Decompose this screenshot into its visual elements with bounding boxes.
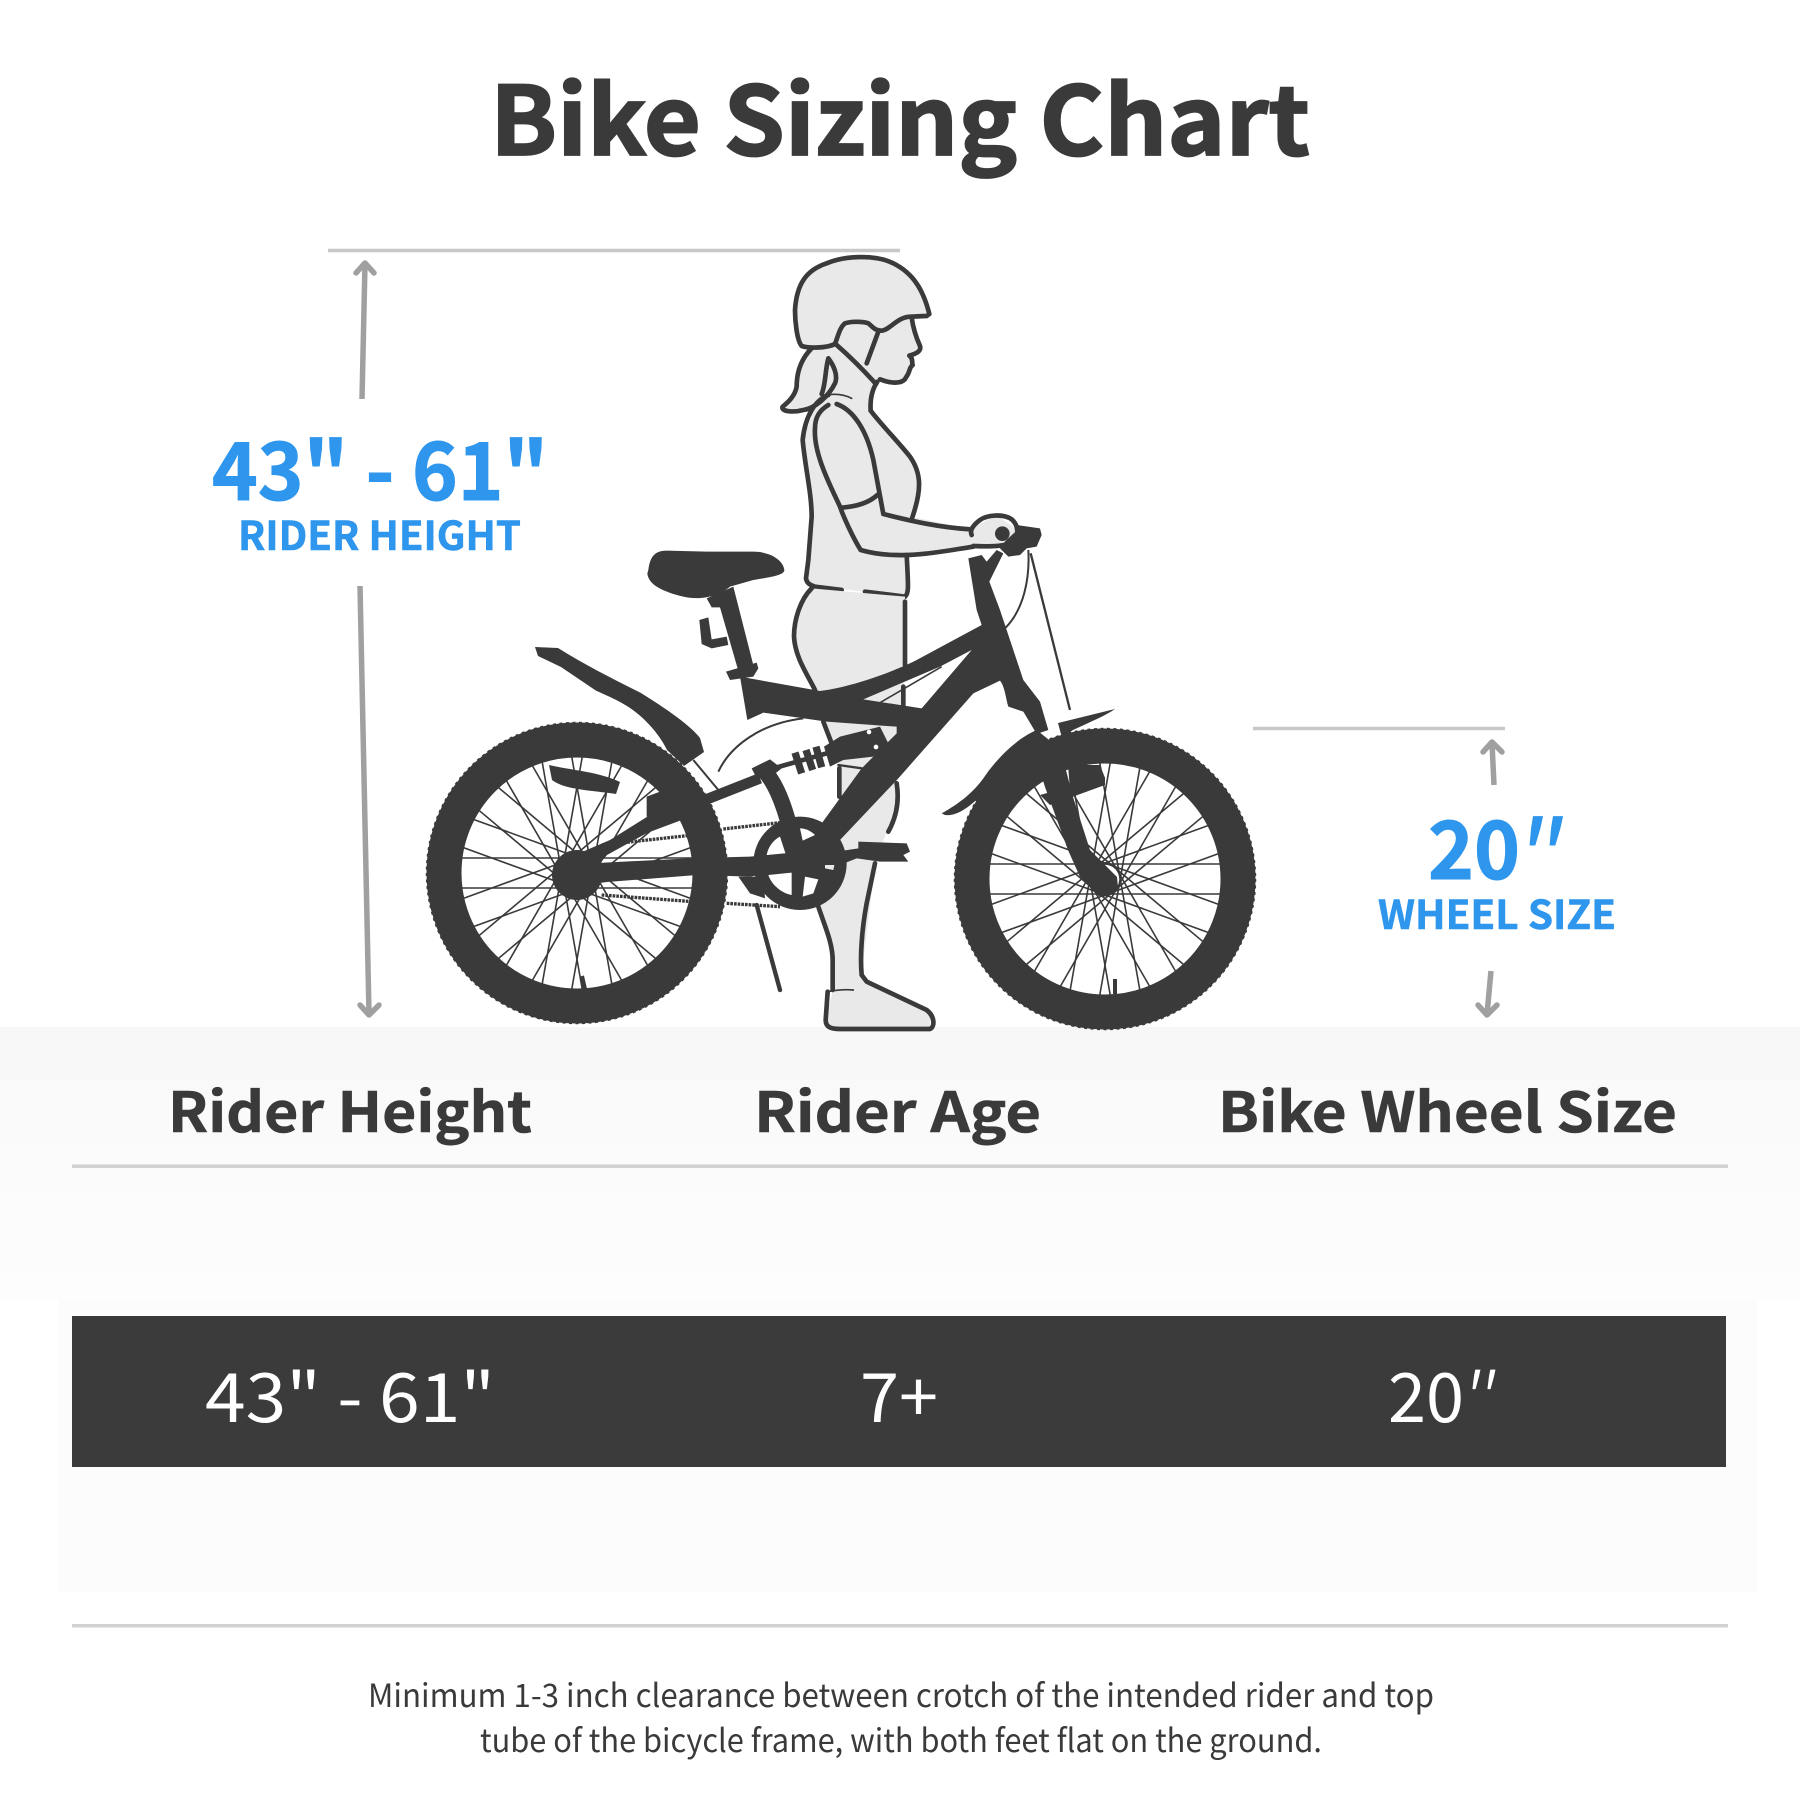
arrow: rider height down bbox=[360, 586, 379, 1015]
table background panel bbox=[0, 1027, 1800, 1592]
arrow: wheel size down bbox=[1478, 971, 1497, 1015]
chain bbox=[602, 823, 780, 907]
data: rider age: 7+ bbox=[860, 1343, 938, 1442]
title: Bike Sizing Chart bbox=[490, 46, 1310, 183]
rear fender and reflector bbox=[535, 647, 704, 794]
rear shock bbox=[773, 727, 888, 773]
table header: rider height: Rider Height bbox=[168, 1068, 532, 1148]
wheel size value: '' bbox=[1516, 787, 1563, 903]
crank arm and pedal bbox=[837, 842, 910, 865]
footnote line 1: Minimum 1-3 inch clearance between crotch of the intended rider and top bbox=[368, 1671, 1434, 1717]
front fork, fender and brake bbox=[942, 709, 1118, 897]
chainring bbox=[753, 817, 847, 910]
data: wheel size: 20 bbox=[1388, 1343, 1464, 1442]
front wheel bbox=[955, 729, 1255, 1029]
wheel size top reference line bbox=[1253, 727, 1505, 730]
rear wheel bbox=[427, 723, 727, 1023]
footnote line 2: tube of the bicycle frame, with both feet flat on the ground. bbox=[480, 1716, 1322, 1762]
rider figure bbox=[782, 257, 1017, 1029]
wheel size label: WHEEL SIZE bbox=[1378, 883, 1616, 941]
arrow: wheel size up bbox=[1483, 742, 1502, 785]
rider height label: RIDER HEIGHT bbox=[238, 504, 521, 562]
rider upper body bbox=[782, 257, 1017, 597]
frame, shock and drivetrain bbox=[575, 550, 1070, 990]
saddle and seat post bbox=[647, 551, 784, 680]
data: wheel size: '' bbox=[1460, 1343, 1496, 1442]
rear triangle and swing link bbox=[575, 759, 827, 898]
rider height value: 43" - 61" bbox=[212, 408, 548, 524]
header rule bbox=[72, 1164, 1728, 1168]
handlebar grip behind hand bbox=[1000, 525, 1042, 557]
dark data row bbox=[72, 1316, 1726, 1467]
wheel size value bbox=[1428, 787, 1563, 903]
frame thin brace bbox=[880, 667, 942, 703]
main frame bbox=[740, 550, 1048, 840]
rider height top reference line bbox=[328, 249, 900, 252]
rider legs bbox=[794, 588, 933, 1029]
arrow: rider height up bbox=[356, 263, 374, 399]
data: rider height: 43" - 61" bbox=[205, 1343, 495, 1442]
table header: bike wheel size: Bike Wheel Size bbox=[1218, 1068, 1677, 1148]
table header: rider age: Rider Age bbox=[754, 1068, 1041, 1148]
bottom rule bbox=[72, 1624, 1728, 1628]
bicycle bbox=[427, 550, 1255, 1029]
wheel size value: 20 bbox=[1428, 787, 1520, 903]
brake cables bbox=[693, 550, 1070, 790]
